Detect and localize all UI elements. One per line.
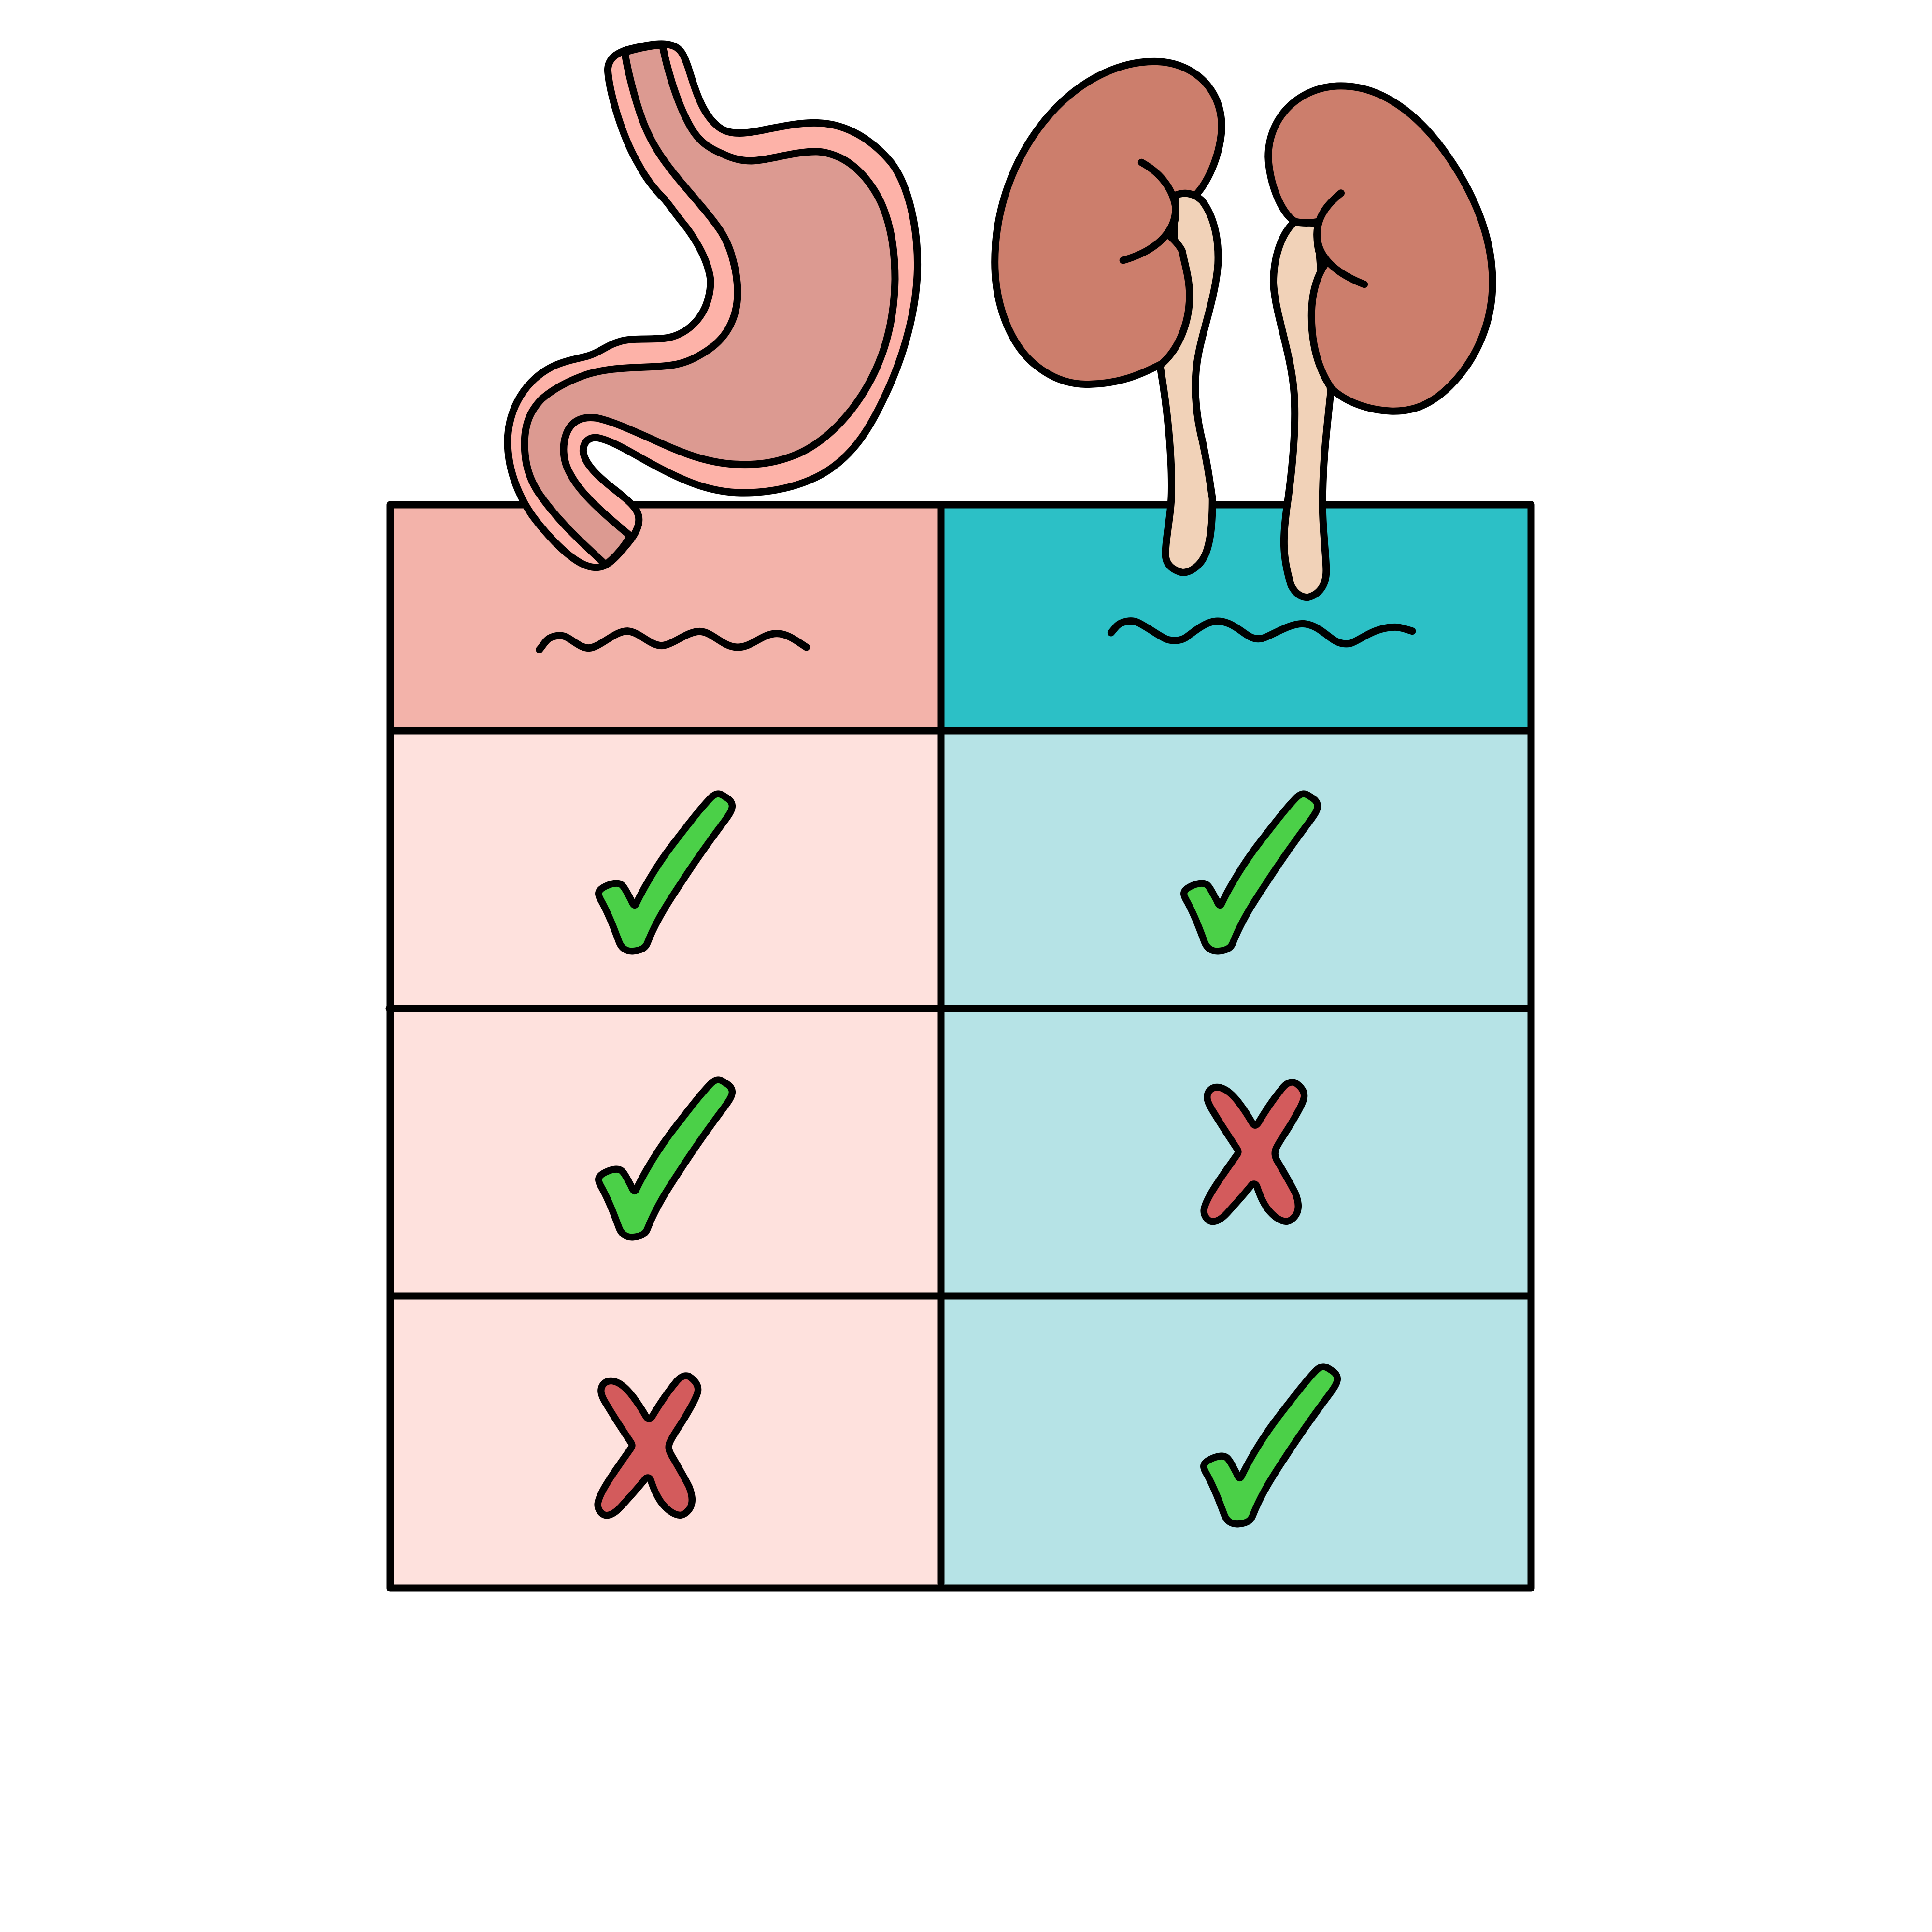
row 3 left cell [390, 1296, 941, 1588]
row 2 right cell [941, 1009, 1531, 1296]
left kidney hilum line [1123, 162, 1176, 260]
row 2 left cell [390, 1009, 941, 1296]
icon: stomach [508, 44, 918, 568]
header cell: kidneys [941, 505, 1531, 731]
comparison table [389, 505, 1531, 1588]
stomach outer wall [508, 44, 918, 568]
icon: kidneys with ureters [995, 61, 1492, 597]
left ureter [1160, 192, 1218, 572]
left kidney [995, 61, 1222, 384]
table grid lines [389, 505, 1531, 1588]
row 1 left cell [390, 731, 941, 1009]
right kidney [1268, 86, 1492, 411]
row 1 right cell [941, 731, 1531, 1009]
stomach inner lining [525, 45, 895, 565]
icon: check, stomach row 2 [598, 1080, 732, 1237]
right ureter [1273, 222, 1331, 597]
row 3 right cell [941, 1296, 1531, 1588]
icon: check, kidneys row 1 [1184, 794, 1318, 951]
icon: cross, kidneys row 2 [1204, 1082, 1304, 1222]
icon: cross, stomach row 3 [598, 1376, 698, 1515]
header cell: stomach [390, 505, 941, 731]
icon: check, kidneys row 3 [1204, 1367, 1337, 1524]
right kidney hilum line [1317, 193, 1364, 284]
icon: check, stomach row 1 [598, 794, 732, 951]
header label squiggle: stomach [540, 631, 807, 650]
header label squiggle: kidneys [1111, 621, 1412, 644]
